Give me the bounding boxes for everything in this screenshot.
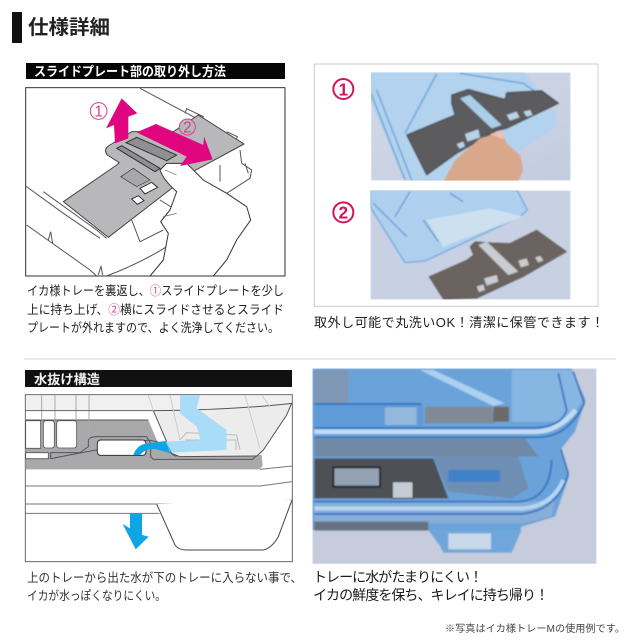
heading: slide plate removal: スライドプレート部の取り外し方法 [34,64,226,79]
arrow 2 [137,124,213,166]
upper tray pocket [153,403,292,457]
heading: drainage structure: 水抜け構造 [34,372,100,387]
text block: slide plate instructions: プレートが外れますので、よく洗浄してください。 [27,320,279,335]
text block: slide plate instructions [27,283,284,335]
arrow: water down [123,513,149,549]
water flow [166,395,227,453]
hand [150,163,251,276]
panel: photo steps: 2 [339,203,348,223]
text block: drainage explanation: 上のトレーから出た水が下のトレーに入らない事で、 [27,570,302,585]
step labels [90,103,107,119]
photo 2 [370,189,571,300]
caption: drainage photo: トレーに水がたまりにくい！ [313,569,483,585]
panel: photo steps: 1 [339,79,349,99]
photo 1 [370,72,571,182]
title [12,12,110,43]
caption: drainage photo: イカの鮮度を保ち、キレイに持ち帰り！ [313,587,549,603]
panel: slide plate illustration: 1 [94,104,103,121]
step labels [333,79,353,99]
text block: drainage explanation [27,570,302,603]
caption: photo steps: 取外し可能で丸洗いOK！清潔に保管できます！ [314,315,604,330]
panel: slide plate illustration: 2 [183,119,192,136]
heading: drainage structure [25,370,292,387]
plate [63,115,244,237]
gray tray floor [26,420,263,469]
text block: slide plate instructions: イカ様トレーを裏返し、①スライドプレートを少し [27,283,284,298]
panel: drainage illustration [25,395,292,562]
tray outlines [26,88,252,276]
lower tray lines [26,466,292,513]
arrow 1 [106,98,137,143]
footnote: ※写真はイカ様トレーMの使用例です。 [445,622,625,635]
text block: slide plate instructions: 上に持ち上げ、②横にスライドさせるとスライド [27,302,284,317]
panel: photo steps [314,64,598,306]
caption: drainage photo [313,569,549,603]
panel: slide plate illustration [26,88,285,276]
text block: drainage explanation: イカが水っぽくなりにくい。 [27,588,166,603]
title: 仕様詳細 [28,16,110,39]
photo: stacked trays [312,368,597,564]
